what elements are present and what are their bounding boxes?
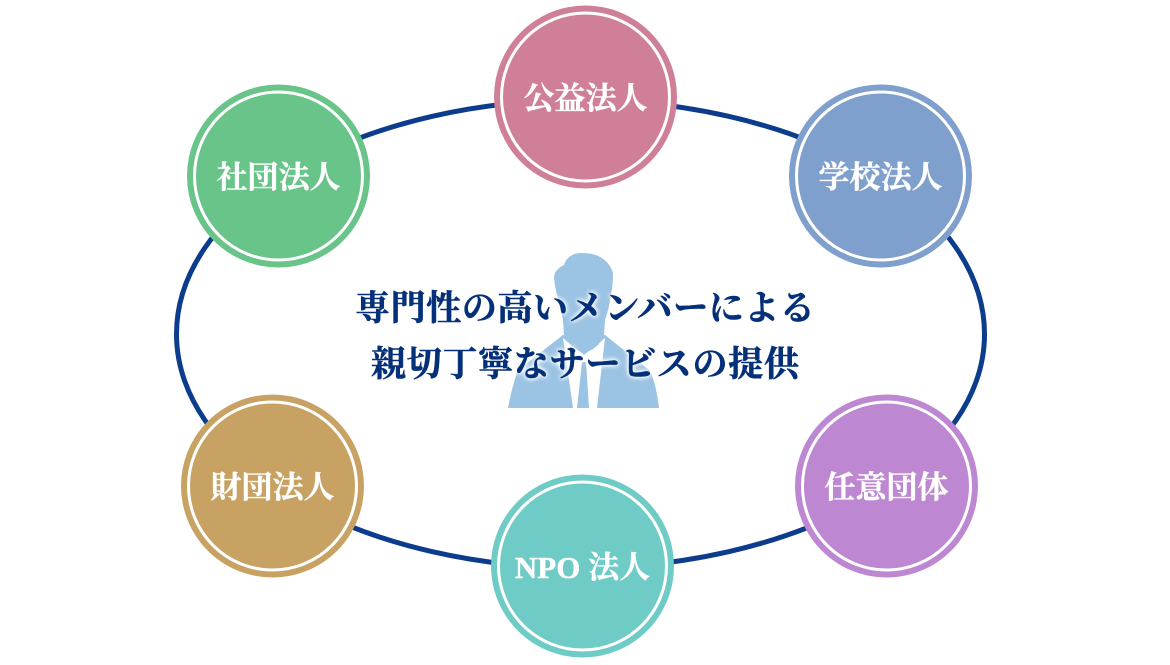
node: 学校法人: 学校法人 — [818, 160, 942, 195]
node: NPO 法人: NPO 法人 — [515, 550, 650, 585]
central heading: 親切丁寧なサービスの提供 — [371, 345, 801, 384]
node: 社団法人: 社団法人 — [216, 160, 340, 195]
connecting ellipse — [176, 100, 984, 568]
node: 公益法人 — [494, 6, 677, 188]
node: 学校法人 — [789, 84, 972, 268]
node: 公益法人: 公益法人 — [524, 81, 648, 116]
icon: businessman silhouette — [508, 253, 659, 408]
node: 任意団体: 任意団体 — [824, 470, 948, 505]
node: NPO 法人 — [491, 474, 674, 658]
node: 社団法人 — [187, 84, 370, 268]
node: 任意団体 — [795, 394, 978, 578]
node: 財団法人 — [181, 394, 364, 578]
node: 財団法人: 財団法人 — [210, 470, 334, 505]
central heading — [355, 289, 815, 384]
central heading: 専門性の高いメンバーによる — [355, 289, 815, 328]
